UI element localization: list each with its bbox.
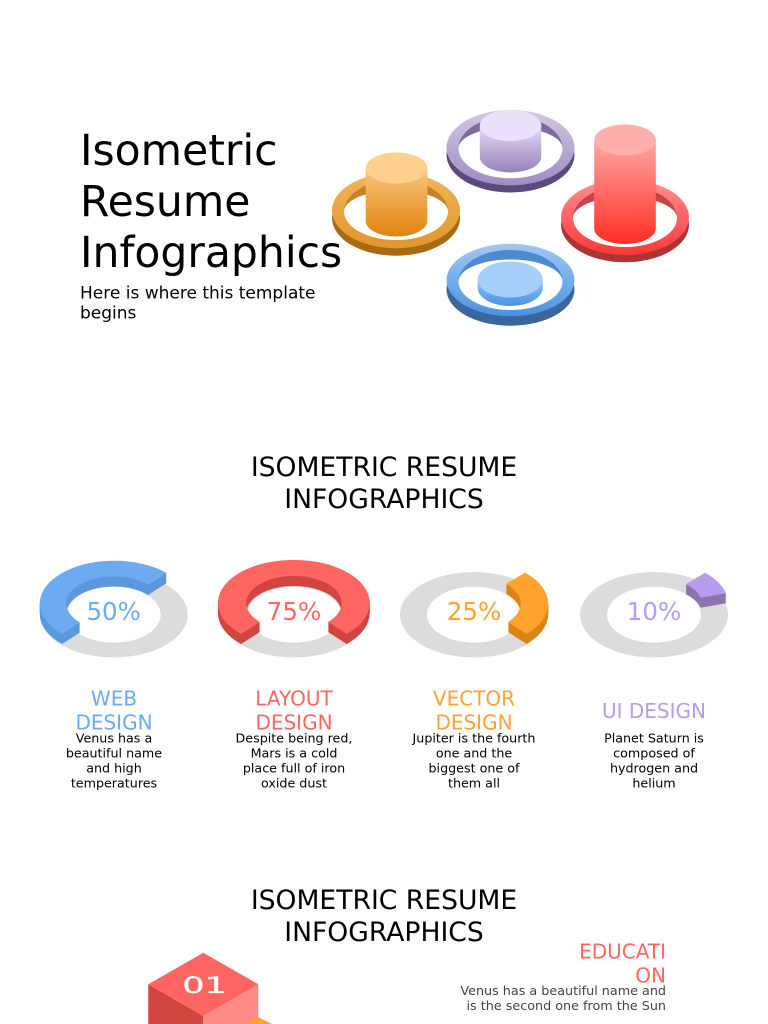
description: web design <box>66 730 162 790</box>
icon: isometric cube 01 <box>148 953 272 1024</box>
description: web design: beautiful name <box>66 746 162 760</box>
description: vector design: biggest one of <box>429 760 520 776</box>
description: layout design: Mars is a cold <box>251 746 337 760</box>
label: education: ON <box>635 964 666 988</box>
donut chart: 50%: 50% <box>86 597 141 626</box>
panel: web design 50% <box>40 561 188 790</box>
section heading: INFOGRAPHICS <box>284 484 484 515</box>
section heading <box>251 452 517 515</box>
panel: layout design 75% <box>218 560 370 790</box>
section heading: ISOMETRIC RESUME <box>251 885 517 916</box>
description: ui design <box>604 730 704 790</box>
title <box>80 127 342 278</box>
donut chart: 75% <box>218 560 370 657</box>
description: vector design: one and the <box>436 746 512 760</box>
description: vector design <box>412 730 535 790</box>
label: vector design <box>433 686 515 734</box>
label: layout design <box>255 686 334 734</box>
label: vector design: VECTOR <box>433 686 515 710</box>
title: Infographics <box>80 229 342 278</box>
subtitle: Here is where this template <box>80 284 316 304</box>
description: web design: temperatures <box>71 776 157 790</box>
title: Isometric <box>80 127 278 176</box>
label: ui design: UI DESIGN <box>602 699 706 723</box>
description: ui design: helium <box>632 776 676 790</box>
label: web design: DESIGN <box>75 710 153 734</box>
description: layout design: Despite being red, <box>236 730 352 746</box>
description: education: Venus has a beautiful name and <box>460 984 666 999</box>
description: layout design <box>236 730 352 790</box>
label: web design: WEB <box>91 686 137 710</box>
description: layout design: oxide dust <box>261 776 327 790</box>
title: Resume <box>80 178 250 227</box>
label: vector design: DESIGN <box>435 710 513 734</box>
section heading: INFOGRAPHICS <box>284 917 484 948</box>
panel: vector design 25% <box>400 572 548 790</box>
panel: ui design 10% <box>580 572 728 790</box>
icon: isometric cube 01: 01 <box>182 973 227 998</box>
label: education: EDUCATI <box>579 940 666 964</box>
description: ui design: hydrogen and <box>610 760 698 776</box>
description: education: is the second one from the Sun <box>467 999 666 1014</box>
description: education <box>460 984 666 1014</box>
icon: blue ring with short cylinder <box>446 244 574 326</box>
icon: red ring with tall cylinder <box>561 124 689 262</box>
description: web design: Venus has a <box>76 730 152 746</box>
donut chart: 50% <box>40 561 188 657</box>
description: web design: and high <box>86 760 142 776</box>
icon: isometric ring and cylinder group <box>332 110 689 326</box>
subtitle <box>80 284 316 324</box>
description: layout design: place full of iron <box>243 760 345 776</box>
description: vector design: them all <box>448 776 500 790</box>
description: ui design: composed of <box>613 746 695 760</box>
icon: purple ring with cylinder <box>446 110 574 192</box>
donut chart: 10%: 10% <box>627 597 681 626</box>
label: layout design: LAYOUT <box>255 686 334 710</box>
icon: orange ring with cylinder <box>332 152 460 256</box>
label: layout design: DESIGN <box>255 710 333 734</box>
donut chart: 25% <box>400 572 548 657</box>
label: web design <box>75 686 153 734</box>
description: vector design: Jupiter is the fourth <box>412 730 535 746</box>
donut chart: 25%: 25% <box>447 597 501 626</box>
donut chart: 10% <box>580 572 728 657</box>
donut chart: 75%: 75% <box>267 597 321 626</box>
section heading <box>251 885 517 948</box>
subtitle: begins <box>80 304 137 324</box>
section heading: ISOMETRIC RESUME <box>251 452 517 483</box>
description: ui design: Planet Saturn is <box>604 730 704 746</box>
label: education <box>579 940 666 988</box>
